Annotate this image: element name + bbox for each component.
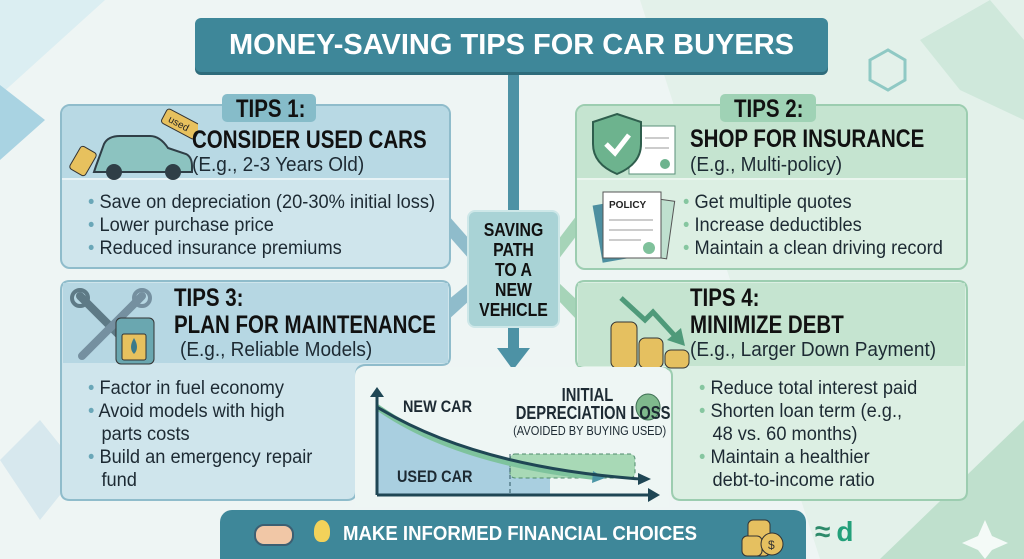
- label: initial depreciation loss: [513, 385, 670, 438]
- title: MONEY-SAVING TIPS FOR CAR BUYERS: [229, 29, 794, 61]
- icon: policy: POLICY: [609, 200, 647, 211]
- logo: ≈d: [815, 516, 853, 547]
- heading: CONSIDER USED CARS: [192, 126, 427, 154]
- icon: shield: [592, 113, 676, 175]
- bullet list: Reduced insurance premiums: [99, 238, 342, 259]
- center box: saving path: TO A: [495, 260, 532, 280]
- icon: handshake: [254, 524, 294, 546]
- bullet list: Save on depreciation (20-30% initial loss): [99, 192, 435, 213]
- panel: tip 1: [60, 104, 451, 269]
- bullet list: fund: [101, 470, 137, 491]
- icon: used car: used: [166, 114, 191, 134]
- bullet list: parts costs: [101, 424, 190, 445]
- footer text: MAKE INFORMED FINANCIAL CHOICES: [343, 523, 697, 545]
- icon: coins: [742, 520, 784, 556]
- sub heading: (E.g., Reliable Models): [180, 339, 372, 361]
- icon: policy: [592, 192, 676, 263]
- bullet list: 48 vs. 60 months): [712, 424, 857, 445]
- bullet list: Avoid models with high: [98, 401, 285, 422]
- panel: tip 3: PLAN FOR MAINTENANCE: [174, 311, 436, 339]
- title: [195, 18, 828, 72]
- center box: saving path: PATH: [493, 240, 534, 260]
- sub heading: (E.g., Multi-policy): [690, 154, 842, 176]
- center box: saving path: SAVING: [484, 220, 543, 240]
- icon: lightbulb: [314, 520, 330, 542]
- bullet list: debt-to-income ratio: [712, 470, 875, 491]
- label: new car: NEW CAR: [403, 397, 472, 416]
- heading: TIPS 3:: [174, 284, 243, 312]
- bullet list: Increase deductibles: [694, 215, 862, 236]
- center box: saving path: VEHICLE: [479, 300, 548, 320]
- label: initial depreciation loss: INITIAL: [562, 385, 613, 405]
- label: used car: USED CAR: [397, 467, 472, 486]
- center box: saving path: NEW: [495, 280, 532, 300]
- label: tips 2: TIPS 2:: [734, 95, 803, 123]
- heading: TIPS 4:: [690, 284, 759, 312]
- bullet list: [700, 378, 917, 491]
- icon: tools and oil can: [70, 288, 154, 364]
- bullet list: Get multiple quotes: [694, 192, 852, 213]
- bullet list: [684, 192, 943, 259]
- chart: depreciation: [355, 367, 670, 502]
- panel: tip 4: [575, 280, 968, 501]
- label: tips 2: [720, 94, 816, 122]
- bullet list: Maintain a healthier: [710, 447, 870, 468]
- panel: tip 4: MINIMIZE DEBT: [690, 311, 844, 339]
- sub heading: (E.g., 2-3 Years Old): [192, 154, 364, 176]
- panel: tip 2: [575, 104, 968, 270]
- footer banner: [220, 510, 806, 559]
- bullet list: Lower purchase price: [99, 215, 274, 236]
- sub heading: (E.g., Larger Down Payment): [690, 339, 936, 361]
- bullet list: Maintain a clean driving record: [694, 238, 943, 259]
- label: tips 1: [222, 94, 316, 122]
- icon: coins and down arrow: [610, 296, 690, 368]
- bullet list: Shorten loan term (e.g.,: [710, 401, 902, 422]
- center box: saving path: [467, 210, 560, 328]
- bullet list: [88, 378, 312, 491]
- bullet list: [88, 192, 435, 259]
- icon: used car: [69, 108, 198, 180]
- panel: tip 3: [60, 280, 451, 501]
- bullet list: Factor in fuel economy: [99, 378, 284, 399]
- heading: SHOP FOR INSURANCE: [690, 125, 924, 153]
- label: initial depreciation loss: DEPRECIATION LOSS: [516, 403, 670, 423]
- label: tips 1: TIPS 1:: [236, 95, 305, 123]
- label: initial depreciation loss: (AVOIDED BY BUYING USED): [513, 423, 666, 438]
- bullet list: Reduce total interest paid: [710, 378, 917, 399]
- bullet list: Build an emergency repair: [99, 447, 312, 468]
- icon: coins: $: [768, 538, 775, 552]
